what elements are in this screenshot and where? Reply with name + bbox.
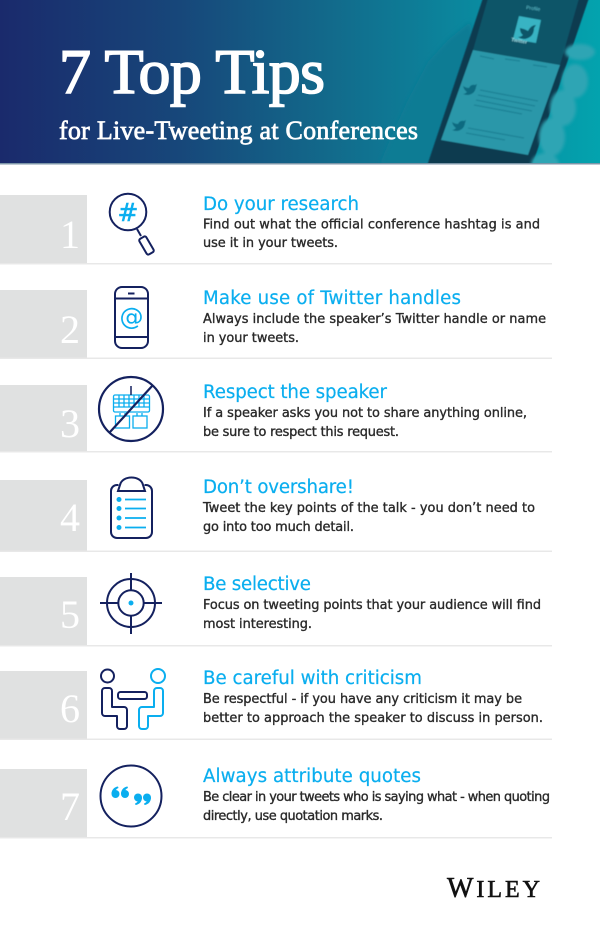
icon: smartphone with at sign: @ [120,303,144,331]
tip 5 text: Focus on tweeting points that your audience will find [203,598,541,613]
tip 5 text: most interesting. [203,617,312,632]
number block 7: 7 [60,784,80,829]
icon: clipboard checklist [111,478,152,538]
tip 7 text: directly, use quotation marks. [203,809,383,824]
number block 6 [0,671,87,739]
tip 3 [0,377,552,452]
tip 7 text [203,790,550,824]
tip 6 text: better to approach the speaker to discuss in person. [203,711,543,726]
photo: hand holding phone with Twitter profile: Profile [526,5,541,13]
subtitle: for Live-Tweeting at Conferences [59,116,418,145]
icon: magnifying glass with hashtag [110,194,154,255]
tip 3 text: If a speaker asks you not to share anything online, [203,406,527,421]
header banner [0,0,600,177]
tip 6 text [203,692,543,726]
icon: smartphone with at sign [115,287,148,348]
tip 1 text: Find out what the official conference hashtag is and [203,218,540,232]
photo: hand holding phone with Twitter profile: Twitter [511,37,528,46]
tip 2 text [203,312,546,346]
title: 7 Top Tips [59,36,325,107]
number block 2 [0,290,87,358]
tip 5 text [203,598,541,632]
number block 3: 3 [60,401,80,446]
number block 2: 2 [60,307,80,352]
icon: magnifying glass with hashtag: # [118,198,138,227]
tip 3 text: be sure to respect this request. [203,425,399,440]
icon: quotation marks in circle [100,766,162,826]
number block 1 [0,195,87,263]
photo: hand holding phone with Twitter profile [427,0,596,163]
tip 1 text [203,218,540,251]
tip 2 [0,287,552,359]
number block 3 [0,385,87,451]
icon: crossed-out hands on keyboard [99,377,163,441]
tip 4 [0,477,552,552]
number block 5: 5 [60,592,80,637]
tip 1 heading: Do your research [203,194,359,215]
number block 4: 4 [60,495,80,540]
number block 4 [0,480,87,551]
tip 4 text: Tweet the key points of the talk - you don’t need to [202,501,535,516]
tip 4 heading: Don’t overshare! [203,477,354,498]
tip 3 text [203,406,527,440]
tip 3 heading: Respect the speaker [203,382,388,403]
tip 4 text: go into too much detail. [203,520,354,535]
tip 4 text [202,501,535,535]
tip 5 [0,573,552,646]
tip 7 text: Be clear in your tweets who is saying what - when quoting [203,790,550,805]
tip 5 heading: Be selective [203,574,311,595]
icon: two people at a table [101,669,165,729]
tip 6 text: Be respectful - if you have any criticism it may be [203,692,522,707]
Wiley logo: WILEY [447,873,540,904]
tip 1 [0,194,552,264]
number block 7 [0,769,87,837]
number block 5 [0,577,87,645]
tip 7 [0,766,552,838]
tip 6 heading: Be careful with criticism [203,668,422,689]
tip 1 text: use it in your tweets. [203,236,338,251]
tip 6 [0,668,552,740]
number block 1: 1 [60,212,80,257]
icon: target crosshair [100,573,162,634]
tip 2 heading: Make use of Twitter handles [203,288,461,309]
tip 2 text: Always include the speaker’s Twitter handle or name [203,312,546,327]
tip 2 text: in your tweets. [203,331,299,346]
number block 6: 6 [60,686,80,731]
tip 7 heading: Always attribute quotes [203,766,421,787]
